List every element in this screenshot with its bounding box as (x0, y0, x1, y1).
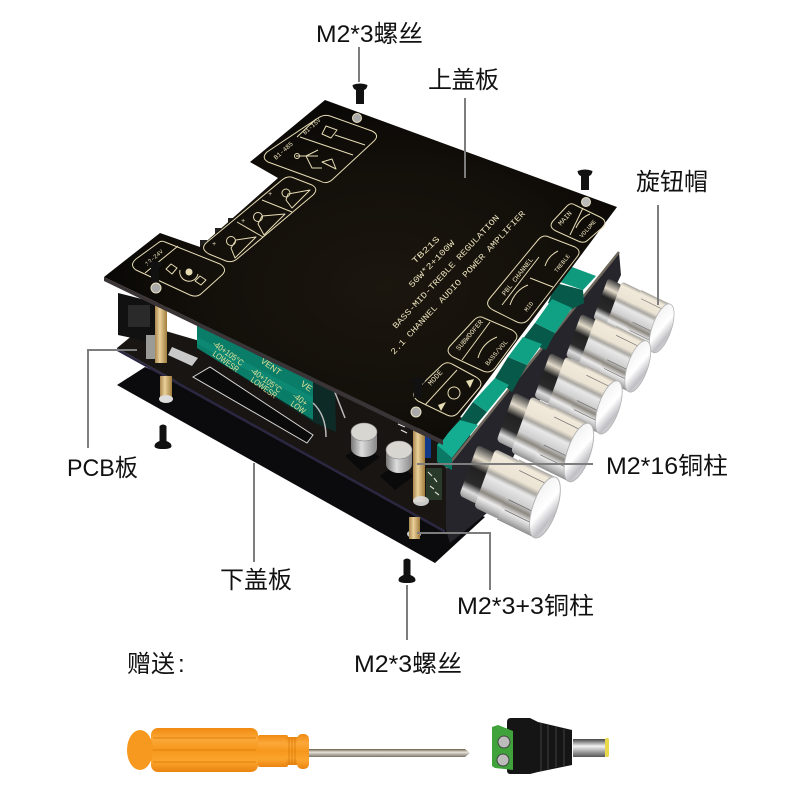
screws (148, 84, 592, 583)
left brass standoff (155, 304, 167, 363)
green potentiometer blocks (417, 267, 596, 470)
large green capacitors: -40+105°C (249, 366, 284, 395)
silk: speaker terminals box (204, 177, 316, 262)
large green capacitors: LOW (289, 399, 308, 416)
terminal block behind plate (200, 218, 234, 248)
large green capacitors: LOWESR (249, 375, 279, 400)
label: knob cap: 旋钮帽 (636, 169, 708, 196)
silk: subwoofer box: SUBWOOFER (455, 318, 486, 353)
silk: product text: 50W*2+100W (407, 238, 458, 290)
label: top cover: 上盖板 (428, 67, 499, 94)
silk: product text: BASS-MID-TREBLE REGULATION (391, 213, 502, 331)
large green capacitors: -40+ (291, 391, 310, 408)
lower-right brass standoff (407, 517, 421, 539)
silk: jack and USB box (264, 115, 377, 183)
label: PCB: PCB板 (67, 455, 138, 482)
label: bottom cover: 下盖板 (220, 567, 292, 594)
label: top screw: M2*3螺丝 (316, 21, 423, 48)
silk: mode box: MODE (427, 369, 446, 388)
mounting holes (151, 114, 590, 417)
silk: main volume box (551, 204, 605, 242)
large green capacitors: VENT (259, 356, 283, 377)
silk: jack and USB box: B1-I5V (302, 117, 323, 136)
icon: DC power connector (492, 718, 609, 774)
label: gifts: : (178, 651, 185, 678)
label: M2*3+3 standoff: M2*3+3铜柱 (457, 593, 594, 620)
silk: main volume box: MAIN (557, 210, 574, 228)
silk: speaker terminals box: + (212, 241, 216, 249)
silk: DC power box (132, 241, 225, 296)
label: M2*16 standoff: M2*16铜柱 (606, 453, 728, 480)
PCB right brass standoff (413, 428, 429, 506)
silk: speaker terminals box: + (268, 191, 272, 199)
silk: PBL channel box: MID (523, 300, 535, 313)
silk: mode box (414, 363, 481, 416)
large green capacitors: VE (299, 379, 315, 394)
front panel (446, 252, 621, 543)
large green capacitors: -40+105°C (211, 339, 246, 368)
silk: DC power box: 12-24V (144, 248, 165, 268)
silk: jack and USB box: B1-485 (273, 141, 295, 161)
label: gifts: 赠送 (127, 651, 175, 678)
small electrolytic capacitors (345, 423, 414, 490)
silk: speaker terminals box: + (241, 218, 245, 226)
large green capacitors: LOWESR (211, 349, 241, 374)
silk: product text: 2.1 CHANNEL AUDIO POWER AMPLIFIER (389, 209, 528, 357)
leader lines (88, 47, 658, 640)
silk: PBL channel box: PBL CHANNEL (501, 257, 536, 298)
lower-left brass standoff (159, 376, 173, 403)
silk: PBL channel box: TREBLE (553, 253, 572, 274)
silk: PBL channel box (488, 236, 579, 323)
silk: subwoofer box: BASS/VOL (484, 339, 510, 367)
icon: screwdriver (127, 728, 470, 772)
silk: subwoofer box (448, 317, 517, 372)
capacitor leads (313, 390, 345, 437)
label: bottom screw: M2*3螺丝 (354, 651, 462, 678)
PCB board (117, 325, 470, 533)
large green capacitors (197, 318, 336, 432)
bottom cover plate (117, 367, 485, 563)
silk: main volume box: VOLUME (578, 218, 598, 239)
DC socket on PCB (118, 293, 198, 366)
top cover plate (104, 100, 617, 440)
top cover plate edge (104, 277, 443, 445)
silk: product text: TB21S (410, 235, 442, 266)
knob caps (457, 274, 679, 543)
